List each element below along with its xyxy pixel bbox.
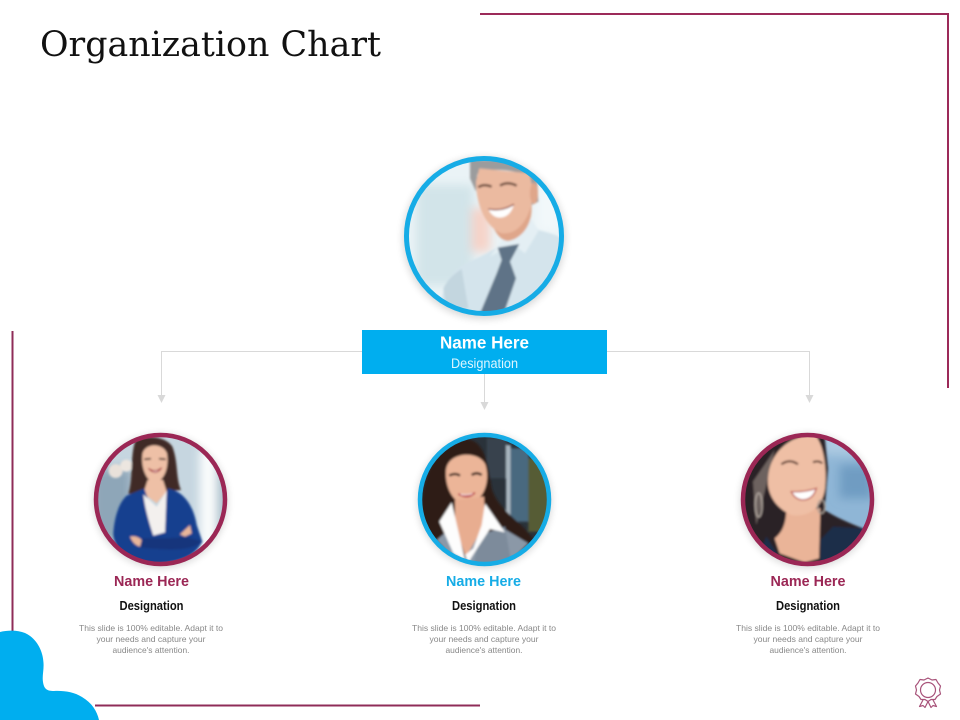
name: Name Here <box>446 574 521 590</box>
description: audience's attention. <box>446 645 522 655</box>
description <box>736 623 880 655</box>
decorative blue blob <box>0 631 99 720</box>
profile text: right <box>736 574 880 655</box>
description: your needs and capture your <box>754 634 863 644</box>
banner: top executive name <box>362 330 607 374</box>
description: your needs and capture your <box>430 634 539 644</box>
portrait: left woman in blue blazer <box>92 432 232 572</box>
description <box>412 623 556 655</box>
portrait: center woman in grey blazer <box>417 432 557 572</box>
designation: Designation <box>452 599 516 613</box>
description: This slide is 100% editable. Adapt it to <box>79 623 223 633</box>
icon: award ribbon <box>916 678 940 708</box>
designation: Designation <box>120 599 184 613</box>
profile text: left <box>79 574 223 655</box>
connector: left branch arrow <box>158 352 362 403</box>
connectors <box>158 352 814 410</box>
description: audience's attention. <box>112 645 190 655</box>
name: Name Here <box>770 574 846 590</box>
description: This slide is 100% editable. Adapt it to <box>736 623 880 633</box>
portrait: right woman smiling sideways <box>740 432 880 572</box>
profile text: center <box>412 574 556 655</box>
description: audience's attention. <box>770 645 846 655</box>
connector: right branch arrow <box>607 352 814 403</box>
description: This slide is 100% editable. Adapt it to <box>412 623 556 633</box>
title: Organization Chart <box>40 25 381 65</box>
description: your needs and capture your <box>96 634 206 644</box>
portrait: top executive <box>403 155 567 319</box>
designation: Designation <box>776 599 840 613</box>
description <box>79 623 223 655</box>
name: Name Here <box>114 574 189 590</box>
frame line: top and right <box>480 14 948 388</box>
banner designation: Designation <box>451 356 518 371</box>
banner name: Name Here <box>440 332 529 352</box>
connector: center arrow <box>480 374 488 410</box>
frame line: left and bottom <box>12 331 480 706</box>
